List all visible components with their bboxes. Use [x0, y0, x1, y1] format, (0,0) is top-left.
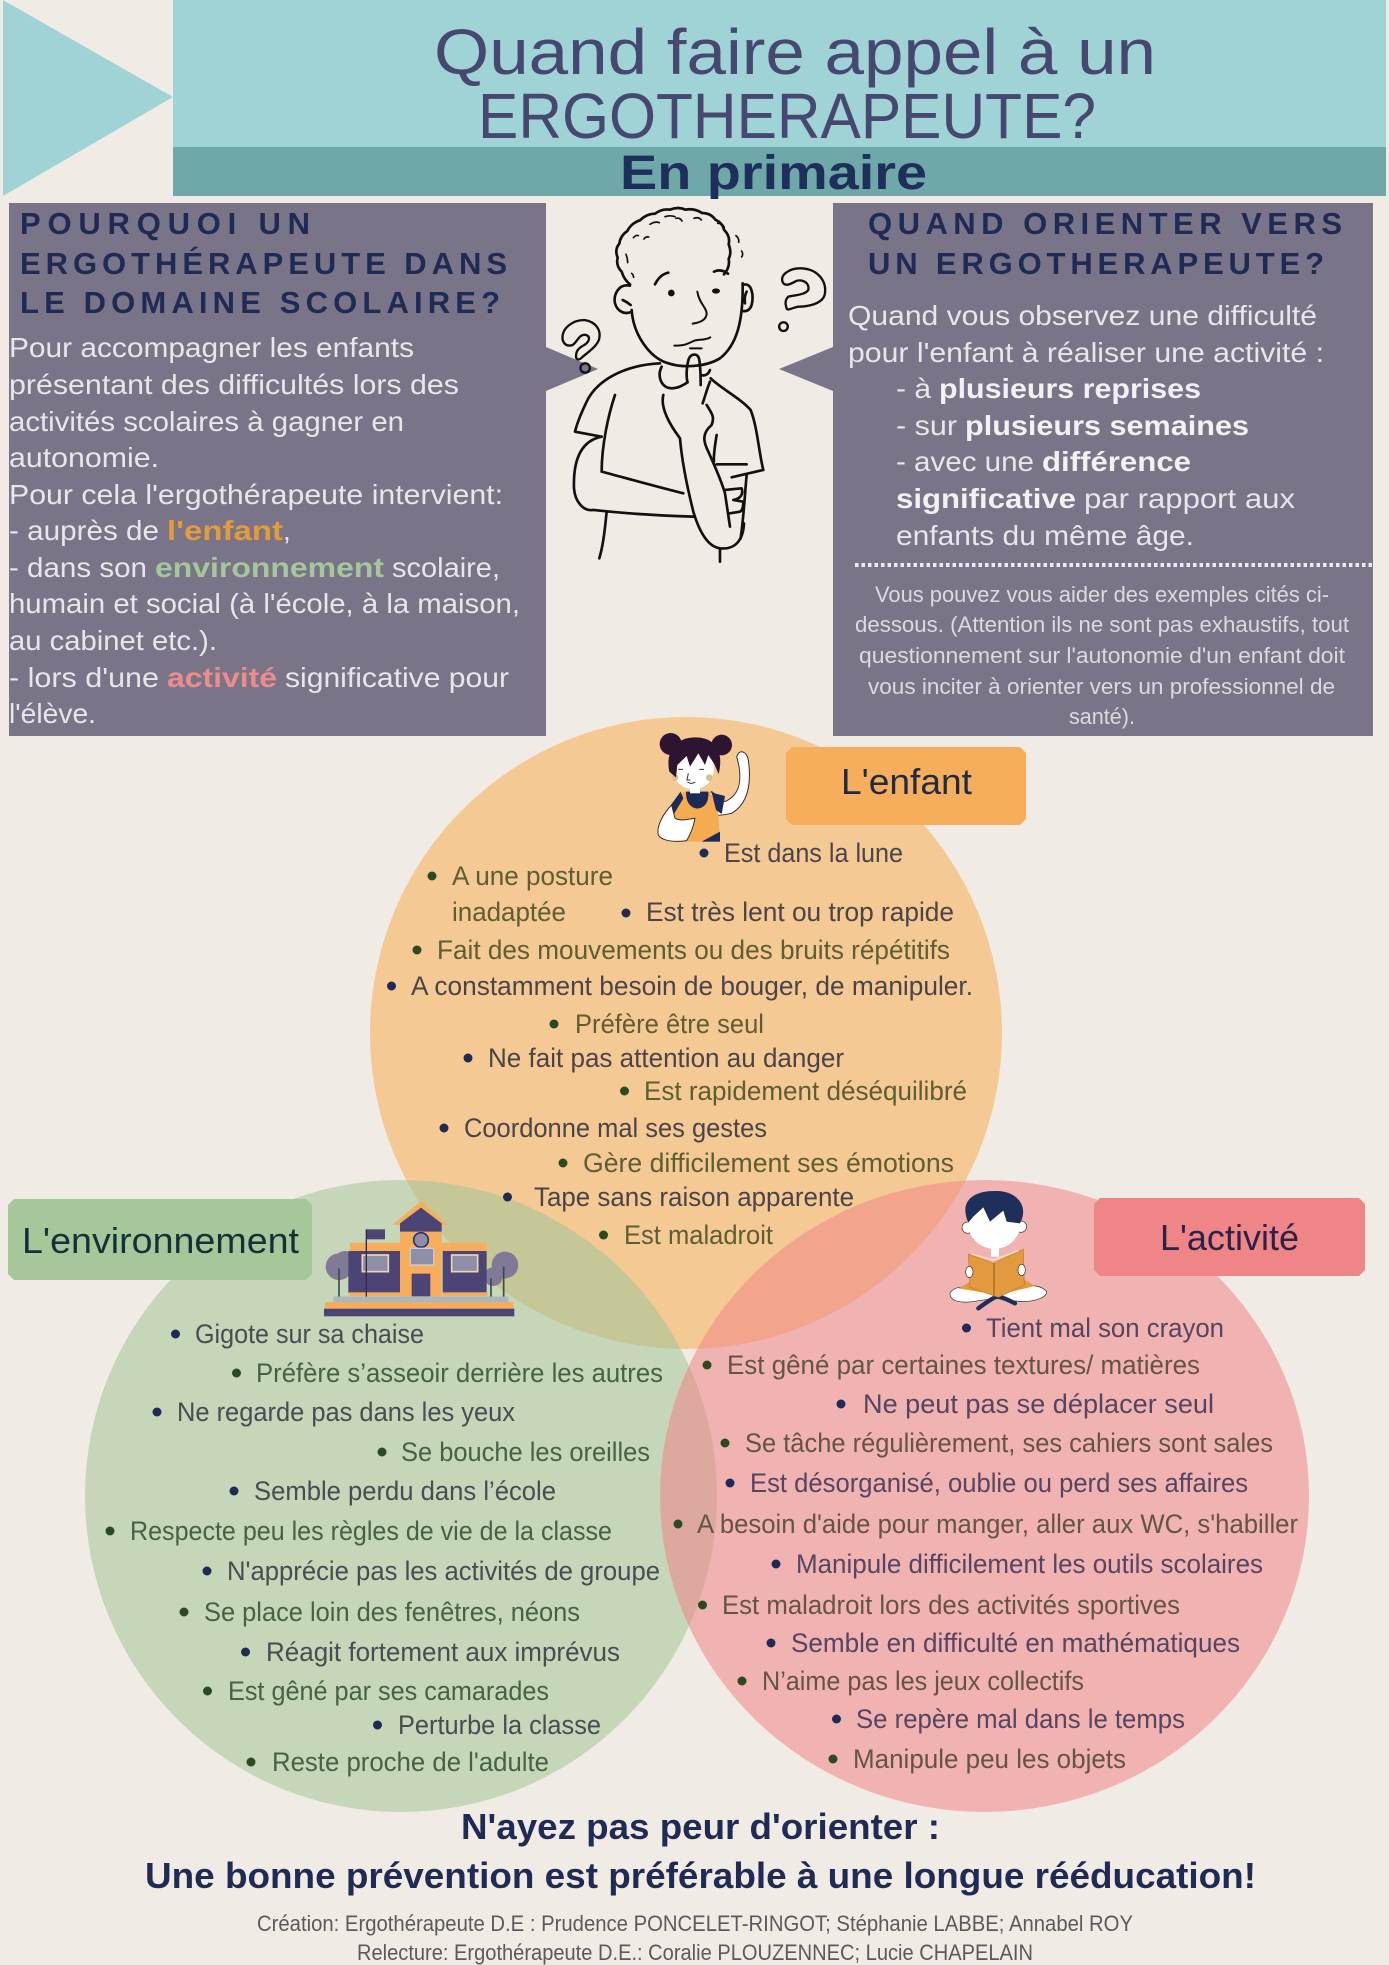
- closing message: [145, 1806, 1256, 1896]
- heading: pourquoi: LE DOMAINE SCOLAIRE?: [20, 285, 500, 320]
- list: items de l'enfant: [387, 838, 973, 1250]
- item: Se bouche les oreilles: [401, 1437, 650, 1467]
- text block: rôle de l'ergothérapeute: - dans son: [9, 552, 147, 583]
- subtitle: En primaire: [620, 147, 927, 200]
- text block: rôle de l'ergothérapeute: Pour accompagner les enfants: [9, 332, 414, 363]
- item: Manipule difficilement les outils scolaires: [796, 1549, 1263, 1579]
- icon: enfant lisant: [950, 1191, 1047, 1308]
- text block: rôle de l'ergothérapeute: Pour cela l'ergothérapeute intervient:: [9, 479, 503, 510]
- title: [434, 16, 1156, 152]
- closing message: N'ayez pas peur d'orienter :: [461, 1806, 940, 1847]
- venn diagram circles: [85, 717, 1309, 1812]
- credits: Relecture: Ergothérapeute D.E.: Coralie PLOUZENNEC; Lucie CHAPELAIN: [357, 1940, 1033, 1965]
- item: Réagit fortement aux imprévus: [266, 1637, 620, 1667]
- item: A besoin d'aide pour manger, aller aux WC, s'habiller: [697, 1509, 1298, 1539]
- text block: rôle de l'ergothérapeute: humain et social (à l'école, à la maison,: [9, 588, 520, 619]
- item: N’aime pas les jeux collectifs: [762, 1666, 1084, 1696]
- item: Respecte peu les règles de vie de la classe: [130, 1516, 612, 1546]
- text block: rôle de l'ergothérapeute: l'élève.: [9, 698, 96, 729]
- item: Ne regarde pas dans les yeux: [177, 1397, 515, 1427]
- text block: rôle de l'ergothérapeute: significative pour: [285, 662, 509, 693]
- label: l'activité: L'activité: [1160, 1217, 1299, 1258]
- label: l'activité: [1094, 1198, 1365, 1276]
- text block: critères d'observation: Quand vous observez une difficulté: [848, 300, 1317, 331]
- item: Reste proche de l'adulte: [272, 1747, 549, 1777]
- heading: pourquoi: ERGOTHÉRAPEUTE DANS: [20, 246, 507, 281]
- item: Ne fait pas attention au danger: [488, 1043, 844, 1073]
- header banner: [173, 0, 1386, 196]
- label: l'environnement: [8, 1199, 312, 1280]
- header triangle: [3, 0, 173, 196]
- text block: rôle de l'ergothérapeute: présentant des difficultés lors des: [9, 369, 459, 400]
- text block: rôle de l'ergothérapeute: scolaire,: [392, 552, 500, 583]
- text block: critères d'observation: - avec une: [896, 446, 1034, 477]
- credits: [257, 1911, 1133, 1965]
- text block: critères d'observation: plusieurs reprises: [939, 373, 1201, 404]
- icon: école: [324, 1201, 518, 1316]
- heading: quand orienter: QUAND ORIENTER VERS: [868, 206, 1342, 241]
- text block: critères d'observation: - sur: [896, 410, 957, 441]
- text block: rôle de l'ergothérapeute: - lors d'une: [9, 662, 159, 693]
- list: items de l'activité: [674, 1313, 1298, 1774]
- list: items de l'environnement: [106, 1319, 663, 1777]
- item: Est rapidement déséquilibré: [644, 1076, 967, 1106]
- text block: rôle de l'ergothérapeute: autonomie.: [9, 442, 159, 473]
- heading: quand orienter: UN ERGOTHERAPEUTE?: [868, 246, 1324, 281]
- title: Quand faire appel à un: [434, 16, 1156, 88]
- label: l'environnement: L'environnement: [22, 1220, 299, 1261]
- item: Semble en difficulté en mathématiques: [791, 1628, 1240, 1658]
- item: Est très lent ou trop rapide: [646, 897, 954, 927]
- text block: rôle de l'ergothérapeute: l'enfant: [167, 515, 283, 546]
- text block: critères d'observation: différence: [1042, 446, 1191, 477]
- item: Préfère s’asseoir derrière les autres: [256, 1358, 663, 1388]
- text block: critères d'observation: enfants du même âge.: [896, 520, 1194, 551]
- item: Semble perdu dans l’école: [254, 1476, 556, 1506]
- item: Se place loin des fenêtres, néons: [204, 1597, 580, 1627]
- item: Perturbe la classe: [398, 1710, 601, 1740]
- text block: rôle de l'ergothérapeute: environnement: [155, 552, 384, 583]
- text block: rôle de l'ergothérapeute: activités scolaires à gagner en: [9, 406, 404, 437]
- text block: note exemples: Vous pouvez vous aider des exemples cités ci-: [875, 582, 1329, 607]
- item: Est dans la lune: [724, 838, 903, 868]
- text block: note exemples: dessous. (Attention ils ne sont pas exhaustifs, tout: [855, 612, 1349, 637]
- item: Est gêné par ses camarades: [228, 1676, 549, 1706]
- item: Ne peut pas se déplacer seul: [863, 1389, 1214, 1419]
- text block: rôle de l'ergothérapeute: [9, 332, 520, 729]
- text block: note exemples: vous inciter à orienter vers un professionnel de: [868, 674, 1335, 699]
- text block: rôle de l'ergothérapeute: au cabinet etc.).: [9, 625, 217, 656]
- text block: critères d'observation: [848, 300, 1324, 551]
- item: Est désorganisé, oublie ou perd ses affaires: [750, 1468, 1248, 1498]
- item: Préfère être seul: [575, 1009, 764, 1039]
- heading: pourquoi: POURQUOI UN: [20, 206, 310, 241]
- item: Gère difficilement ses émotions: [583, 1148, 954, 1178]
- item: Tape sans raison apparente: [534, 1182, 854, 1212]
- text block: critères d'observation: - à: [896, 373, 931, 404]
- item: N'apprécie pas les activités de groupe: [227, 1556, 660, 1586]
- item: A constamment besoin de bouger, de manipuler.: [411, 971, 973, 1001]
- text block: critères d'observation: pour l'enfant à réaliser une activité :: [848, 337, 1324, 368]
- title: ERGOTHERAPEUTE?: [478, 80, 1096, 152]
- text block: rôle de l'ergothérapeute: ,: [283, 515, 291, 546]
- icon: fillette main levée: [658, 733, 749, 842]
- closing message: Une bonne prévention est préférable à une longue rééducation!: [145, 1855, 1256, 1896]
- text block: critères d'observation: plusieurs semaines: [965, 410, 1249, 441]
- text block: rôle de l'ergothérapeute: activité: [167, 662, 277, 693]
- text block: critères d'observation: par rapport aux: [1084, 483, 1295, 514]
- label: l'enfant: L'enfant: [841, 761, 972, 802]
- text block: rôle de l'ergothérapeute: - auprès de: [9, 515, 159, 546]
- item: Tient mal son crayon: [986, 1313, 1224, 1343]
- item: Gigote sur sa chaise: [195, 1319, 424, 1349]
- item: [428, 861, 613, 927]
- panel: quand orienter: [779, 203, 1373, 736]
- item: Est maladroit lors des activités sportives: [722, 1590, 1180, 1620]
- text block: note exemples: santé).: [1069, 704, 1135, 729]
- heading: quand orienter: [868, 206, 1342, 281]
- text block: note exemples: [855, 582, 1349, 729]
- panel: pourquoi un ergothérapeute: [9, 203, 598, 736]
- heading: pourquoi: [20, 206, 507, 320]
- item: Fait des mouvements ou des bruits répétitifs: [437, 935, 950, 965]
- label: l'enfant: [786, 747, 1026, 825]
- item: inadaptée: [452, 897, 566, 927]
- item: Est gêné par certaines textures/ matières: [727, 1350, 1200, 1380]
- credits: Création: Ergothérapeute D.E : Prudence PONCELET-RINGOT; Stéphanie LABBE; Annabel ROY: [257, 1911, 1133, 1936]
- illustration: garçon pensif: [563, 208, 825, 562]
- item: Est maladroit: [624, 1220, 773, 1250]
- item: Coordonne mal ses gestes: [464, 1113, 767, 1143]
- text block: critères d'observation: significative: [896, 483, 1076, 514]
- item: A une posture: [452, 861, 613, 891]
- text block: note exemples: questionnement sur l'autonomie d'un enfant doit: [859, 643, 1345, 668]
- item: Se tâche régulièrement, ses cahiers sont sales: [745, 1428, 1273, 1458]
- item: Se repère mal dans le temps: [856, 1704, 1185, 1734]
- item: Manipule peu les objets: [853, 1744, 1126, 1774]
